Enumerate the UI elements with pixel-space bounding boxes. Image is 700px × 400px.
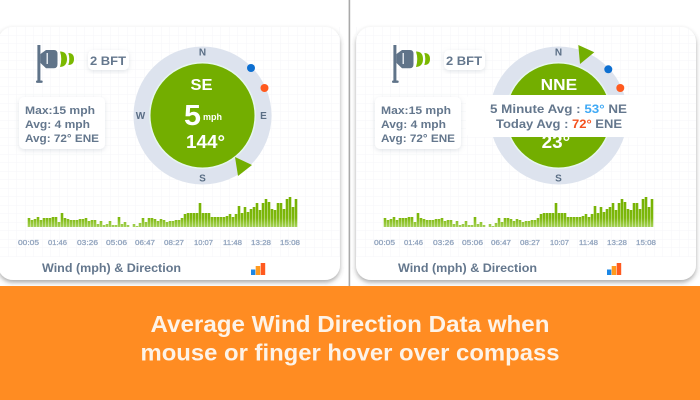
bar chart: wind speed: [29, 197, 296, 227]
time axis labels: 05:06: [462, 238, 483, 247]
compass: S: [555, 174, 562, 184]
panel: right wind card: [356, 27, 696, 280]
time axis labels: 00:05: [18, 238, 39, 247]
chart title: Wind (mph) & Direction: [398, 261, 537, 275]
icon: windsock: [36, 45, 74, 83]
callout: average direction tooltip: 5 Minute Avg : 53° NE: [490, 102, 627, 116]
time axis labels: 06:47: [135, 238, 155, 247]
compass: W: [136, 111, 146, 122]
time axis labels: 08:27: [164, 238, 184, 247]
time axis labels: 13:28: [607, 238, 627, 247]
icon: mini bars: [607, 263, 621, 275]
badge: 2 BFT: [444, 50, 485, 70]
time axis labels: 11:48: [223, 238, 242, 247]
badge: 2 BFT: [88, 50, 129, 70]
divider between panels: [349, 0, 350, 287]
stats box: [19, 97, 105, 149]
time axis labels: 10:07: [194, 238, 213, 247]
icon: mini bars: [251, 263, 265, 275]
caption text: Average Wind Direction Data when: [150, 311, 550, 337]
badge: 2 BFT: 2 BFT: [90, 54, 127, 68]
time axis labels: 01:46: [404, 238, 423, 247]
time axis labels: 01:46: [48, 238, 67, 247]
stats box: Avg: 4 mph: [381, 119, 446, 131]
caption banner: [0, 286, 700, 400]
icon: windsock: [392, 45, 430, 83]
time axis labels: 00:05: [374, 238, 395, 247]
time axis labels: 08:27: [520, 238, 540, 247]
compass: [134, 46, 272, 184]
compass: NNE: [541, 77, 578, 94]
caption text: mouse or finger hover over compass: [140, 340, 560, 366]
stats box: Avg: 4 mph: [25, 119, 90, 131]
time axis labels: [374, 238, 656, 247]
compass: N: [199, 48, 206, 58]
compass: 23°: [542, 132, 570, 152]
compass: N: [555, 48, 562, 58]
compass: 144°: [186, 132, 225, 152]
time axis labels: 15:08: [280, 238, 300, 247]
callout: average direction tooltip: [466, 95, 652, 137]
card background: [0, 27, 340, 280]
direction pointer: [235, 157, 252, 176]
stats box: [375, 97, 461, 149]
callout: average direction tooltip: Today Avg : 72° ENE: [496, 117, 622, 131]
compass: [490, 45, 628, 184]
bar chart: wind speed: [385, 197, 652, 227]
time axis labels: 10:07: [550, 238, 569, 247]
time axis labels: 13:28: [251, 238, 271, 247]
time axis labels: 11:48: [579, 238, 598, 247]
compass: mph: [203, 112, 222, 122]
compass: E: [260, 111, 267, 122]
average direction markers: [247, 64, 255, 72]
compass: 5: [184, 100, 201, 132]
time axis labels: 03:26: [77, 238, 98, 247]
stats box: Avg: 72° ENE: [25, 133, 99, 145]
time axis labels: 05:06: [106, 238, 127, 247]
time axis labels: 03:26: [433, 238, 454, 247]
panel: left wind card: [0, 27, 340, 280]
compass: S: [199, 174, 206, 184]
direction pointer: [578, 45, 594, 64]
stats box: Max:15 mph: [381, 105, 451, 117]
average direction markers: [604, 65, 612, 73]
card background: [356, 27, 696, 280]
caption text: [140, 311, 560, 366]
stats box: Max:15 mph: [25, 105, 95, 117]
chart title: Wind (mph) & Direction: [42, 261, 181, 275]
compass: SE: [190, 77, 213, 94]
time axis labels: 06:47: [491, 238, 511, 247]
badge: 2 BFT: 2 BFT: [446, 54, 483, 68]
stats box: Avg: 72° ENE: [381, 133, 455, 145]
time axis labels: [18, 238, 300, 247]
time axis labels: 15:08: [636, 238, 656, 247]
